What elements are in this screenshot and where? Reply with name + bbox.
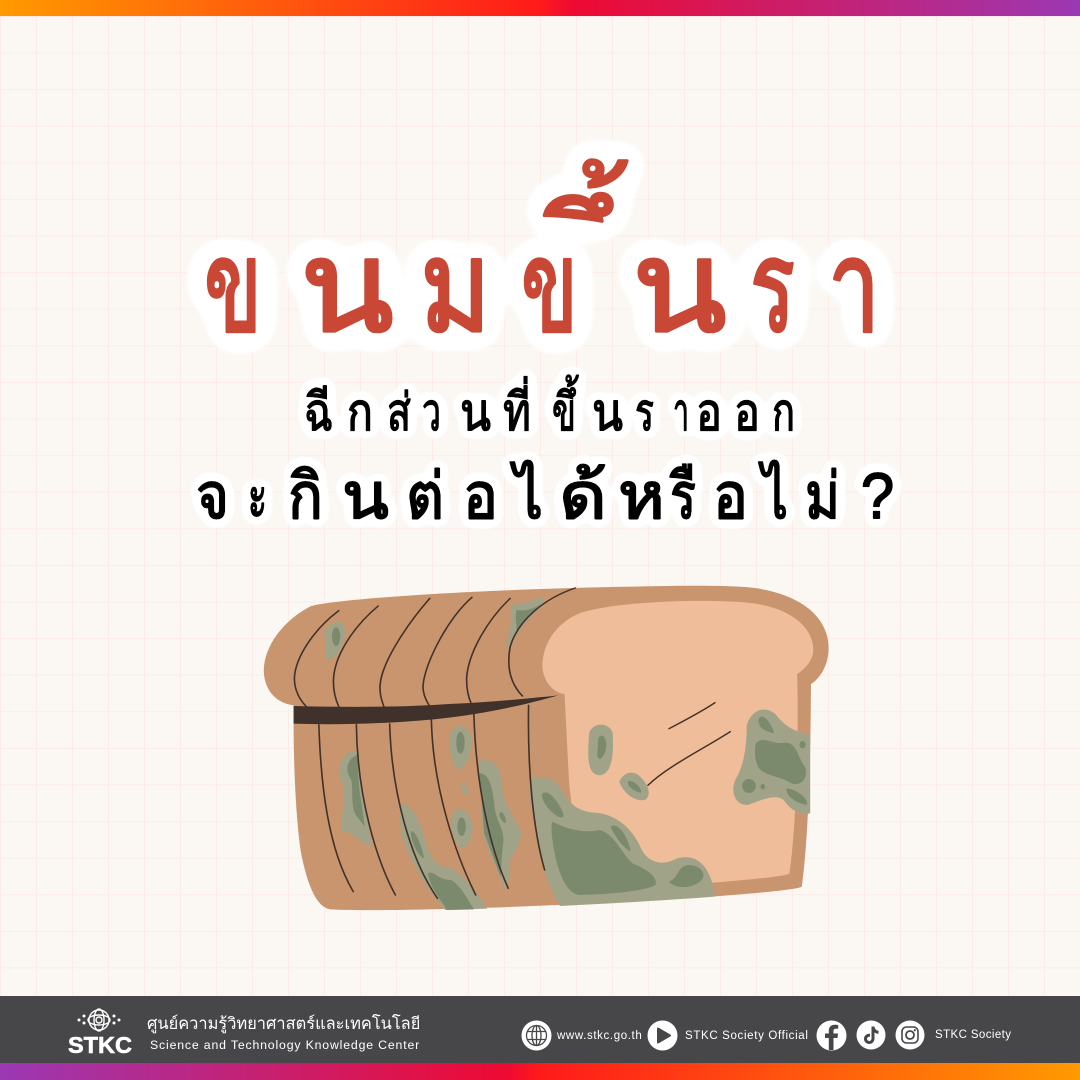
footer org name: Thai: ศูนย์ความรู้วิทยาศาสตร์และเทคโนโลยี bbox=[147, 1015, 420, 1033]
subtitle line 2: ไ bbox=[758, 460, 788, 532]
subtitle line 2: ? bbox=[861, 460, 894, 532]
icon: globe bbox=[522, 1020, 552, 1050]
subtitle line 2: ด้ bbox=[559, 460, 607, 532]
subtitle line 1: ก bbox=[347, 384, 373, 442]
crumb face bbox=[542, 601, 813, 883]
main heading: น bbox=[632, 216, 727, 359]
subtitle line 1: ส่ bbox=[387, 384, 411, 442]
icon: facebook bbox=[816, 1020, 846, 1050]
subtitle line 1: ร bbox=[635, 384, 654, 442]
main heading: ข bbox=[521, 216, 578, 359]
mould: side patches bbox=[339, 726, 521, 910]
main heading: ม bbox=[420, 216, 491, 359]
subtitle line 1: า bbox=[673, 384, 689, 442]
icon: youtube play bbox=[648, 1020, 678, 1050]
icon: instagram bbox=[896, 1020, 924, 1050]
mould: right edge patch bbox=[733, 710, 810, 814]
subtitle line 2: ต่ bbox=[406, 460, 444, 532]
icon: tiktok bbox=[856, 1020, 886, 1050]
footer logo: STKC bbox=[68, 1008, 132, 1056]
main heading: ข bbox=[204, 216, 262, 359]
mould: crust top patches bbox=[323, 598, 544, 661]
top gradient bar bbox=[0, 0, 1080, 16]
subtitle line 1: ว bbox=[422, 384, 441, 442]
subtitle line 1: ก bbox=[772, 384, 795, 442]
main heading: า bbox=[828, 216, 880, 359]
subtitle line 2: อ bbox=[713, 460, 748, 532]
subtitle line 1: อ bbox=[696, 384, 722, 442]
subtitle line 2: ไ bbox=[509, 460, 543, 532]
website text: www.stkc.go.th bbox=[557, 1030, 642, 1042]
subtitle line 2: รื bbox=[670, 460, 696, 532]
subtitle line 2: อ bbox=[463, 460, 498, 532]
subtitle line 2: ม่ bbox=[805, 460, 840, 532]
slice lines bbox=[294, 588, 730, 898]
mould: bottom large bbox=[529, 778, 715, 906]
dark gap under the top crust bbox=[294, 695, 558, 724]
main heading: ร bbox=[750, 216, 795, 359]
subtitle line 2: ะ bbox=[248, 460, 267, 532]
bottom gradient bar bbox=[0, 1063, 1080, 1080]
footer org name: English: Science and Technology Knowledge Center bbox=[150, 1038, 420, 1052]
main heading: ้ bbox=[583, 160, 627, 187]
illustration: mouldy bread loaf bbox=[264, 586, 829, 910]
subtitle line 1: ที่ bbox=[503, 376, 531, 442]
youtube channel text: STKC Society Official bbox=[685, 1030, 809, 1042]
loaf crust bbox=[264, 586, 829, 910]
subtitle line 2: ห bbox=[618, 460, 665, 532]
main heading: น bbox=[300, 216, 394, 359]
mould: crumb small spots bbox=[588, 725, 649, 800]
subtitle line 2: กิ bbox=[288, 460, 323, 532]
subtitle line 1: ขึ้ bbox=[552, 375, 579, 442]
subtitle line 1 bbox=[304, 375, 795, 442]
subtitle line 1: ฉี bbox=[304, 384, 333, 442]
main heading: ึ bbox=[544, 193, 613, 222]
main heading bbox=[204, 160, 880, 359]
subtitle line 2: จ bbox=[196, 460, 229, 532]
subtitle line 2: น bbox=[342, 460, 389, 532]
instagram text: STKC Society bbox=[935, 1029, 1011, 1041]
subtitle line 1: อ bbox=[734, 384, 760, 442]
subtitle line 2 bbox=[196, 460, 894, 532]
subtitle line 1: น bbox=[592, 384, 623, 442]
footer band bbox=[0, 996, 1080, 1063]
subtitle line 1: น bbox=[460, 384, 491, 442]
